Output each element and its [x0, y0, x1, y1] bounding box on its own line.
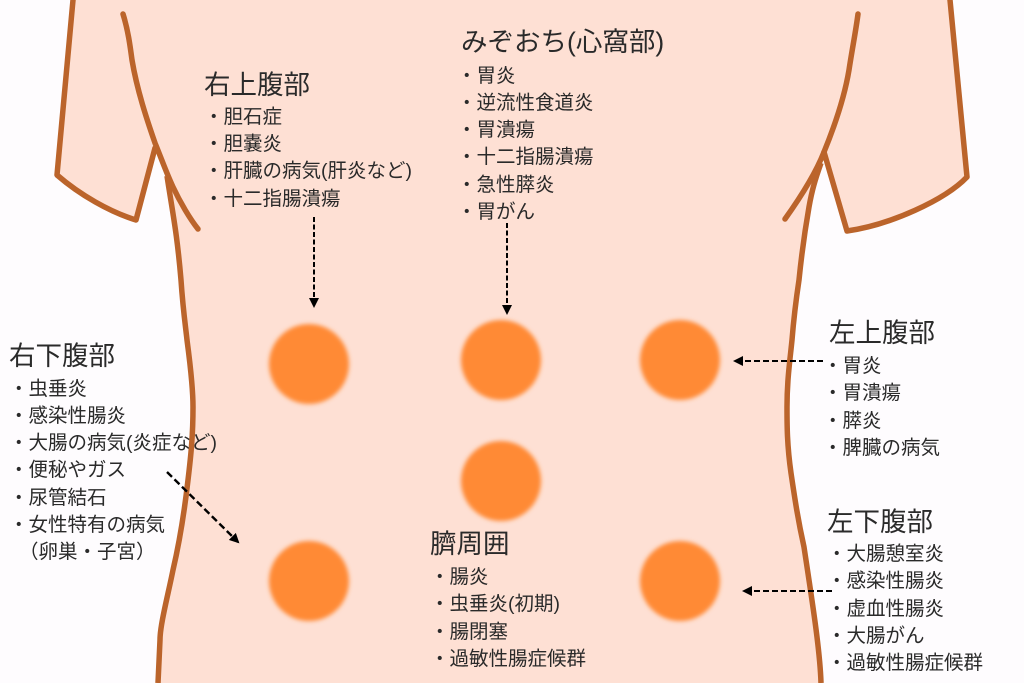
list: ・脾臓の病気 [823, 437, 940, 459]
block: 左上腹部 [823, 318, 940, 459]
list: ・胃潰瘍 [457, 119, 535, 141]
heading: 臍周囲 [430, 529, 510, 559]
spot: right lower [269, 541, 349, 621]
list: ・感染性腸炎 [827, 570, 944, 592]
pain spots [269, 320, 720, 621]
list: ・膵炎 [823, 410, 882, 432]
list: ・腸閉塞 [430, 621, 508, 643]
arrow: left lower [744, 590, 832, 592]
arrow: left upper [735, 360, 823, 362]
list: ・過敏性腸症候群 [827, 652, 983, 674]
left sleeve outline [57, 0, 155, 220]
list: （卵巣・子宮） [19, 541, 156, 563]
list: ・便秘やガス [9, 459, 126, 481]
left armhole line [123, 14, 198, 229]
block: 臍周囲 [430, 529, 586, 670]
list: ・胃炎 [457, 65, 516, 87]
list: ・胃がん [457, 201, 535, 223]
list: ・逆流性食道炎 [457, 92, 594, 114]
list: ・急性膵炎 [457, 174, 555, 196]
list: ・感染性腸炎 [9, 405, 126, 427]
block: みぞおち [457, 27, 664, 223]
left torso outline [158, 176, 193, 683]
arrow: epigastric [506, 223, 508, 313]
arrow: right upper [313, 217, 315, 306]
list: ・女性特有の病気 [9, 514, 165, 536]
list: ・十二指腸潰瘍 [204, 188, 341, 210]
spot: left lower [640, 541, 720, 621]
block: 右下腹部 [9, 341, 217, 563]
block: 左下腹部 [827, 507, 983, 674]
list: ・腸炎 [430, 566, 489, 588]
list [9, 378, 217, 563]
spot: navel [461, 441, 541, 521]
list [823, 355, 940, 459]
spot: right upper [269, 324, 349, 404]
list: ・尿管結石 [9, 487, 107, 509]
list: ・過敏性腸症候群 [430, 648, 586, 670]
right torso outline [787, 163, 821, 683]
spot: epigastric [461, 320, 541, 400]
list [457, 65, 594, 223]
list: ・大腸憩室炎 [827, 543, 944, 565]
arrow: right lower [167, 472, 238, 542]
list: ・虚血性腸炎 [827, 598, 944, 620]
list: ・肝臓の病気(肝炎など) [204, 160, 412, 182]
list: ・大腸がん [827, 625, 925, 647]
list: ・虫垂炎 [9, 378, 87, 400]
block: 右上腹部 [204, 70, 412, 210]
heading: みぞおち(心窩部) [461, 27, 664, 57]
spot: left upper [640, 320, 720, 400]
list: ・大腸の病気(炎症など) [9, 432, 217, 454]
list [204, 106, 412, 210]
list [827, 543, 983, 674]
heading: 左下腹部 [827, 507, 933, 537]
list: ・虫垂炎(初期) [430, 593, 560, 615]
list: ・胃炎 [823, 355, 882, 377]
right sleeve outline [824, 0, 967, 231]
list: ・胆嚢炎 [204, 133, 282, 155]
list: ・胃潰瘍 [823, 382, 901, 404]
right armhole line [785, 14, 858, 219]
heading: 左上腹部 [829, 318, 935, 348]
list [430, 566, 586, 670]
heading: 右上腹部 [204, 70, 310, 100]
list: ・胆石症 [204, 106, 282, 128]
heading: 右下腹部 [9, 341, 115, 371]
list: ・十二指腸潰瘍 [457, 146, 594, 168]
